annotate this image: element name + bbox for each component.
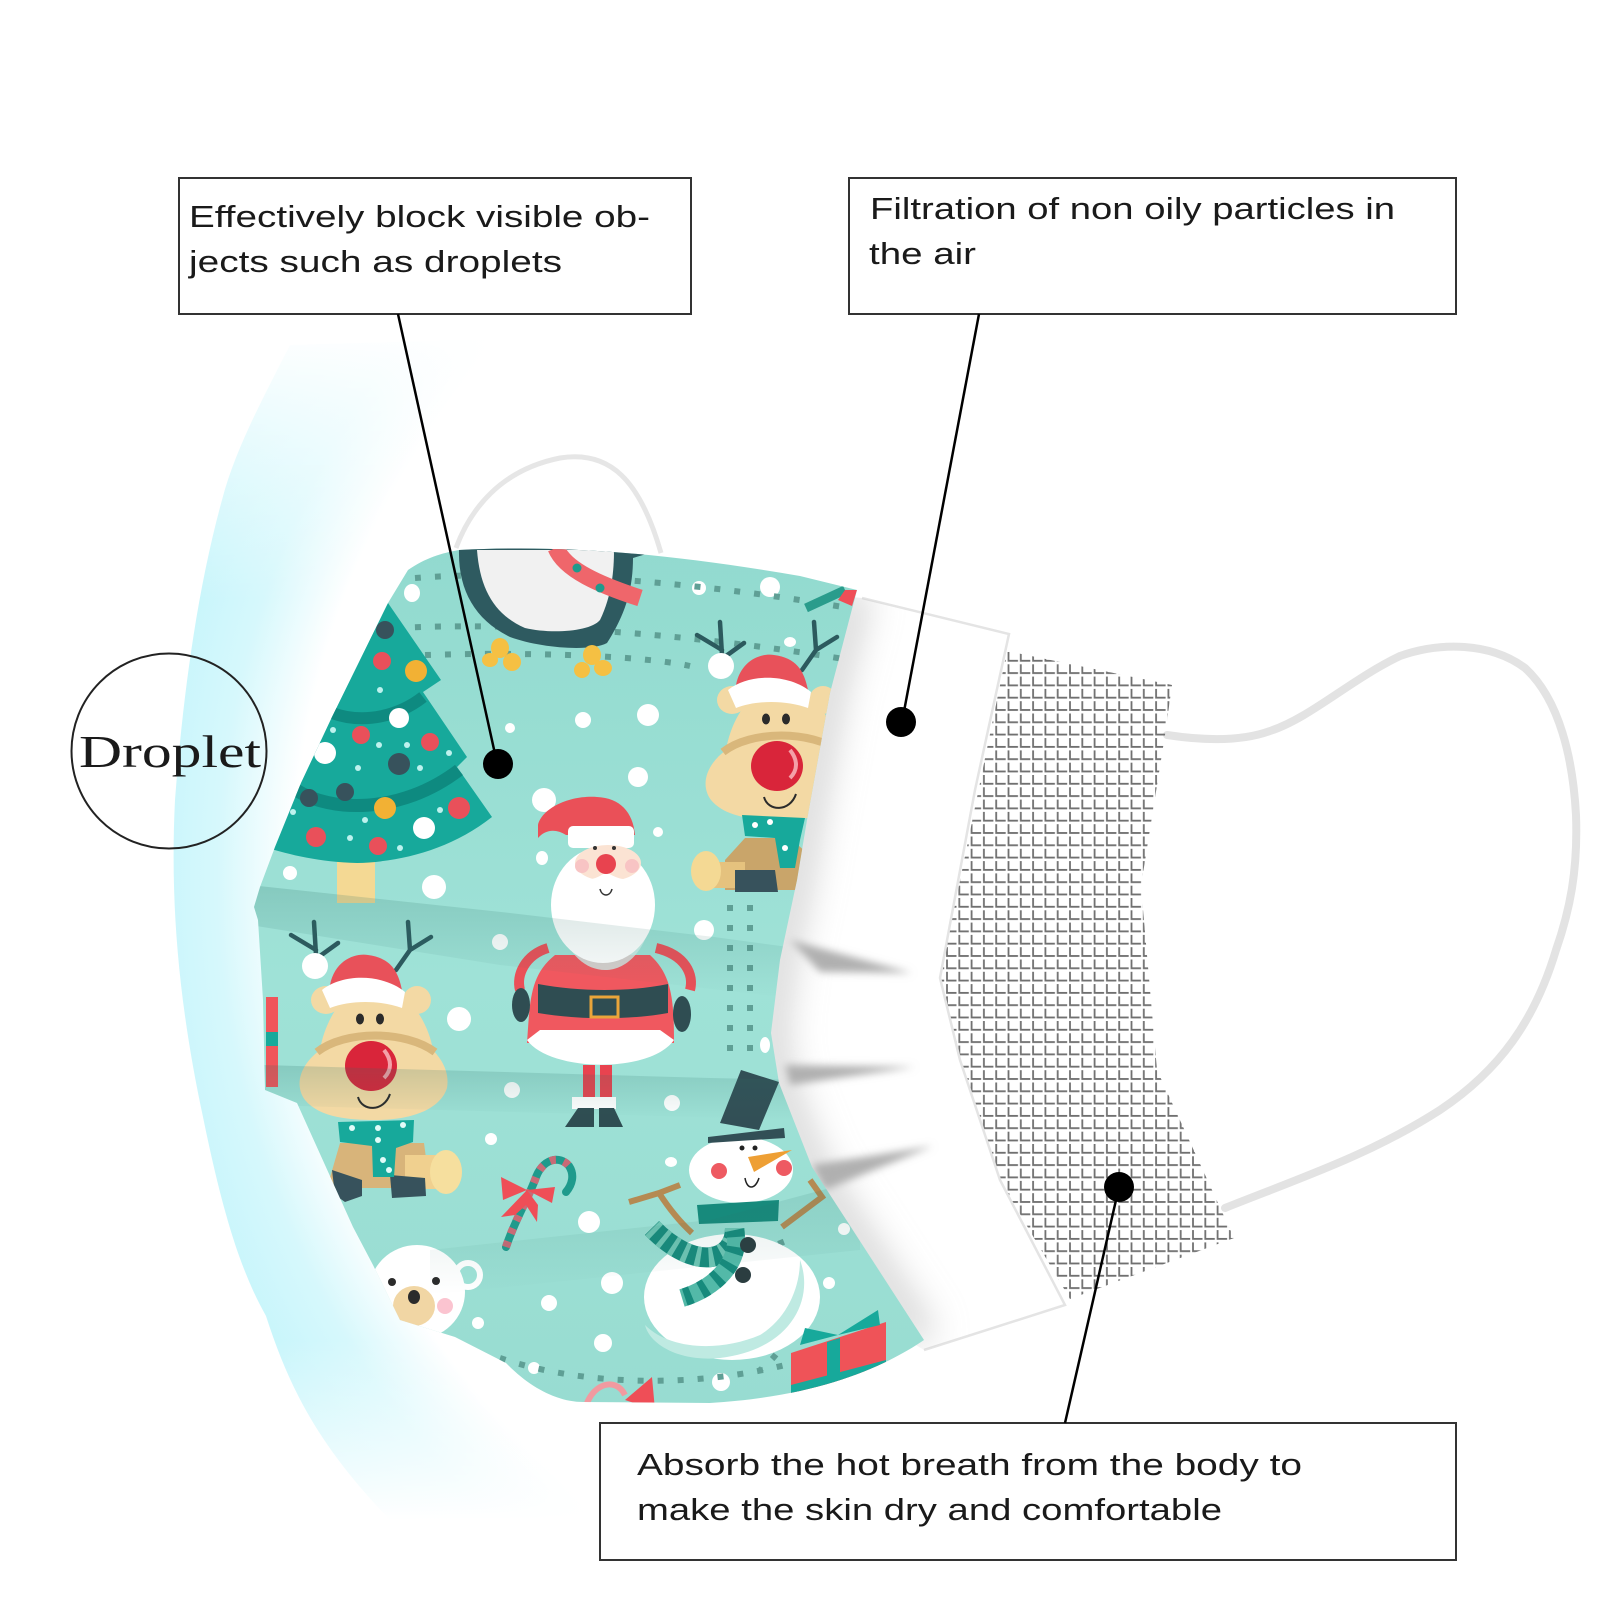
leader: outer layer callout to print (398, 314, 513, 779)
inner filter mesh layer (940, 651, 1234, 1299)
droplet spray band (170, 320, 640, 1535)
character: bottom candy and bow (584, 1377, 654, 1403)
callout box: absorption: make the skin dry and comfortable (637, 1492, 1222, 1527)
droplet label circle (72, 654, 266, 848)
character: top corner candy (806, 590, 857, 608)
callout box: absorption (600, 1423, 1456, 1560)
character: gift box (791, 1310, 886, 1402)
character: polar bear (375, 1245, 483, 1332)
leader: filtration callout to middle layer (886, 314, 979, 737)
callout box: filtration: the air (869, 236, 976, 271)
callout box: filtration (849, 178, 1456, 314)
character: Santa (512, 788, 691, 1127)
snow dots (283, 577, 850, 1391)
callout box: absorption: Absorb the hot breath from the body to (637, 1447, 1302, 1482)
droplet label circle: Droplet (79, 726, 261, 777)
character: left reindeer (266, 922, 462, 1202)
middle white filter layer (740, 590, 1065, 1350)
leader: absorption callout to inner layer (1065, 1172, 1134, 1423)
character: right reindeer (691, 622, 854, 892)
callout box: droplets: Effectively block visible ob- (189, 199, 650, 234)
character: penguin (459, 545, 653, 678)
callout box: droplets (179, 178, 691, 314)
character: Christmas tree (265, 603, 492, 903)
callout box: droplets: jects such as droplets (188, 244, 562, 279)
character: snowman (629, 1070, 822, 1360)
stitched dotted seams (414, 572, 840, 1384)
callout box: filtration: Filtration of non oily particles in (870, 191, 1395, 226)
ear loop: top (456, 457, 661, 553)
character: candy cane (501, 1160, 572, 1247)
printed Christmas outer layer (240, 540, 940, 1420)
ear loop: right (1167, 647, 1576, 1208)
fabric pleat shadows (250, 885, 860, 1295)
